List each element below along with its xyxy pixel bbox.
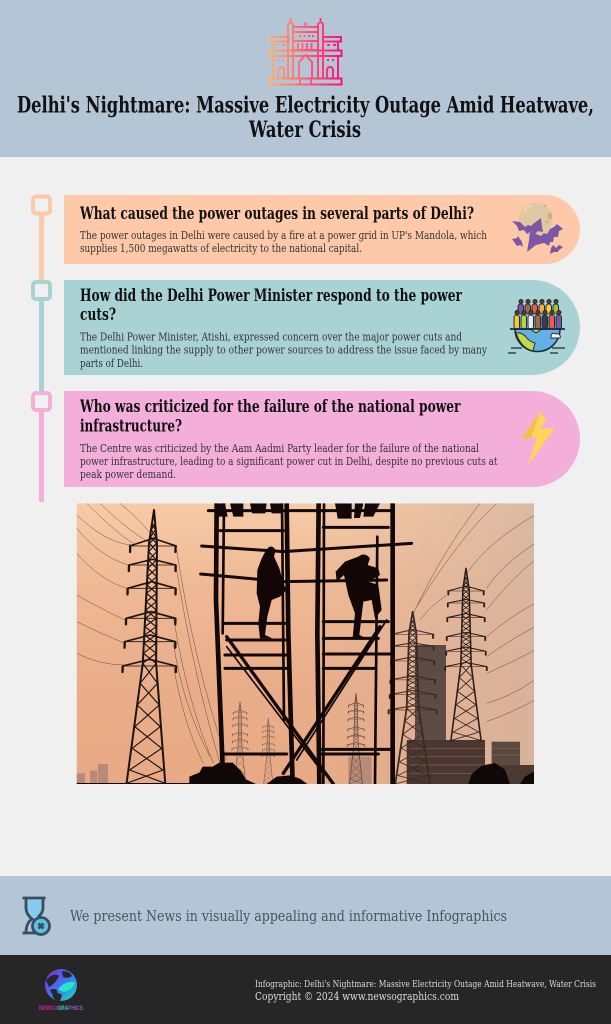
text: answer two <box>80 330 488 370</box>
timeline <box>33 196 50 502</box>
photo: workers on scaffolding among power pylons <box>77 503 535 785</box>
main pylons <box>119 510 181 783</box>
text: answer three <box>80 442 498 481</box>
heading: question one: What caused the power outages in several parts of Delhi? <box>79 204 474 223</box>
buildings <box>407 645 534 785</box>
credit text: Copyright © 2024 www.newsographics.com <box>255 990 459 1003</box>
title <box>17 92 594 143</box>
text: answer one <box>80 229 487 255</box>
scaffold top clutter <box>217 503 380 519</box>
mid pylon <box>389 612 437 784</box>
icon: moon and bats <box>512 202 563 254</box>
panel: who was criticized <box>64 391 580 487</box>
icon: lightning bolt <box>521 412 555 465</box>
foreground trees <box>77 763 534 784</box>
text: answer one: supplies 1,500 megawatts of electricity to the national capital. <box>80 242 362 255</box>
workers <box>257 547 382 638</box>
text: answer two: mentioned linking the supply to other power sources to address the issue faced by many <box>80 344 488 356</box>
icon: hourglass <box>22 898 50 934</box>
text: answer three: peak power demand. <box>80 468 176 481</box>
text: answer one: The power outages in Delhi were caused by a fire at a power grid in UP's Mandola, which <box>80 229 487 242</box>
text: answer two: parts of Delhi. <box>80 357 143 370</box>
heading: question three <box>79 397 461 436</box>
icon: India gate monument <box>270 18 342 84</box>
tagline text: We present News in visually appealing and informative Infographics <box>70 909 507 925</box>
power lines <box>77 503 535 763</box>
heading: question two <box>80 286 462 324</box>
text: answer three: The Centre was criticized by the Aam Aadmi Party leader for the failure of the national <box>80 442 479 455</box>
icon: crowd on globe <box>508 300 565 353</box>
distant skyline <box>77 757 372 784</box>
text: answer three: power infrastructure, leading to a significant power cut in Delhi, despite no previous cuts at <box>80 455 498 468</box>
heading: question two: How did the Delhi Power Minister respond to the power <box>80 286 462 305</box>
logo <box>39 969 83 1012</box>
text: answer two: The Delhi Power Minister, Atishi, expressed concern over the major power cuts and <box>80 330 462 344</box>
panel: what caused the outages <box>64 195 580 264</box>
footer dark band <box>0 955 611 1024</box>
panel: how the minister responded <box>64 280 580 375</box>
heading: question two: cuts? <box>80 305 116 324</box>
footer tagline band <box>0 876 611 955</box>
credit text <box>255 979 596 1003</box>
scaffolding <box>201 503 412 784</box>
logo: NEWSOGRAPHICS <box>39 1005 83 1012</box>
heading: question three: infrastructure? <box>80 416 182 436</box>
distant pylons <box>232 702 248 784</box>
title: Water Crisis <box>248 117 361 143</box>
heading: question three: Who was criticized for the failure of the national power <box>79 397 461 416</box>
header band <box>0 0 611 157</box>
